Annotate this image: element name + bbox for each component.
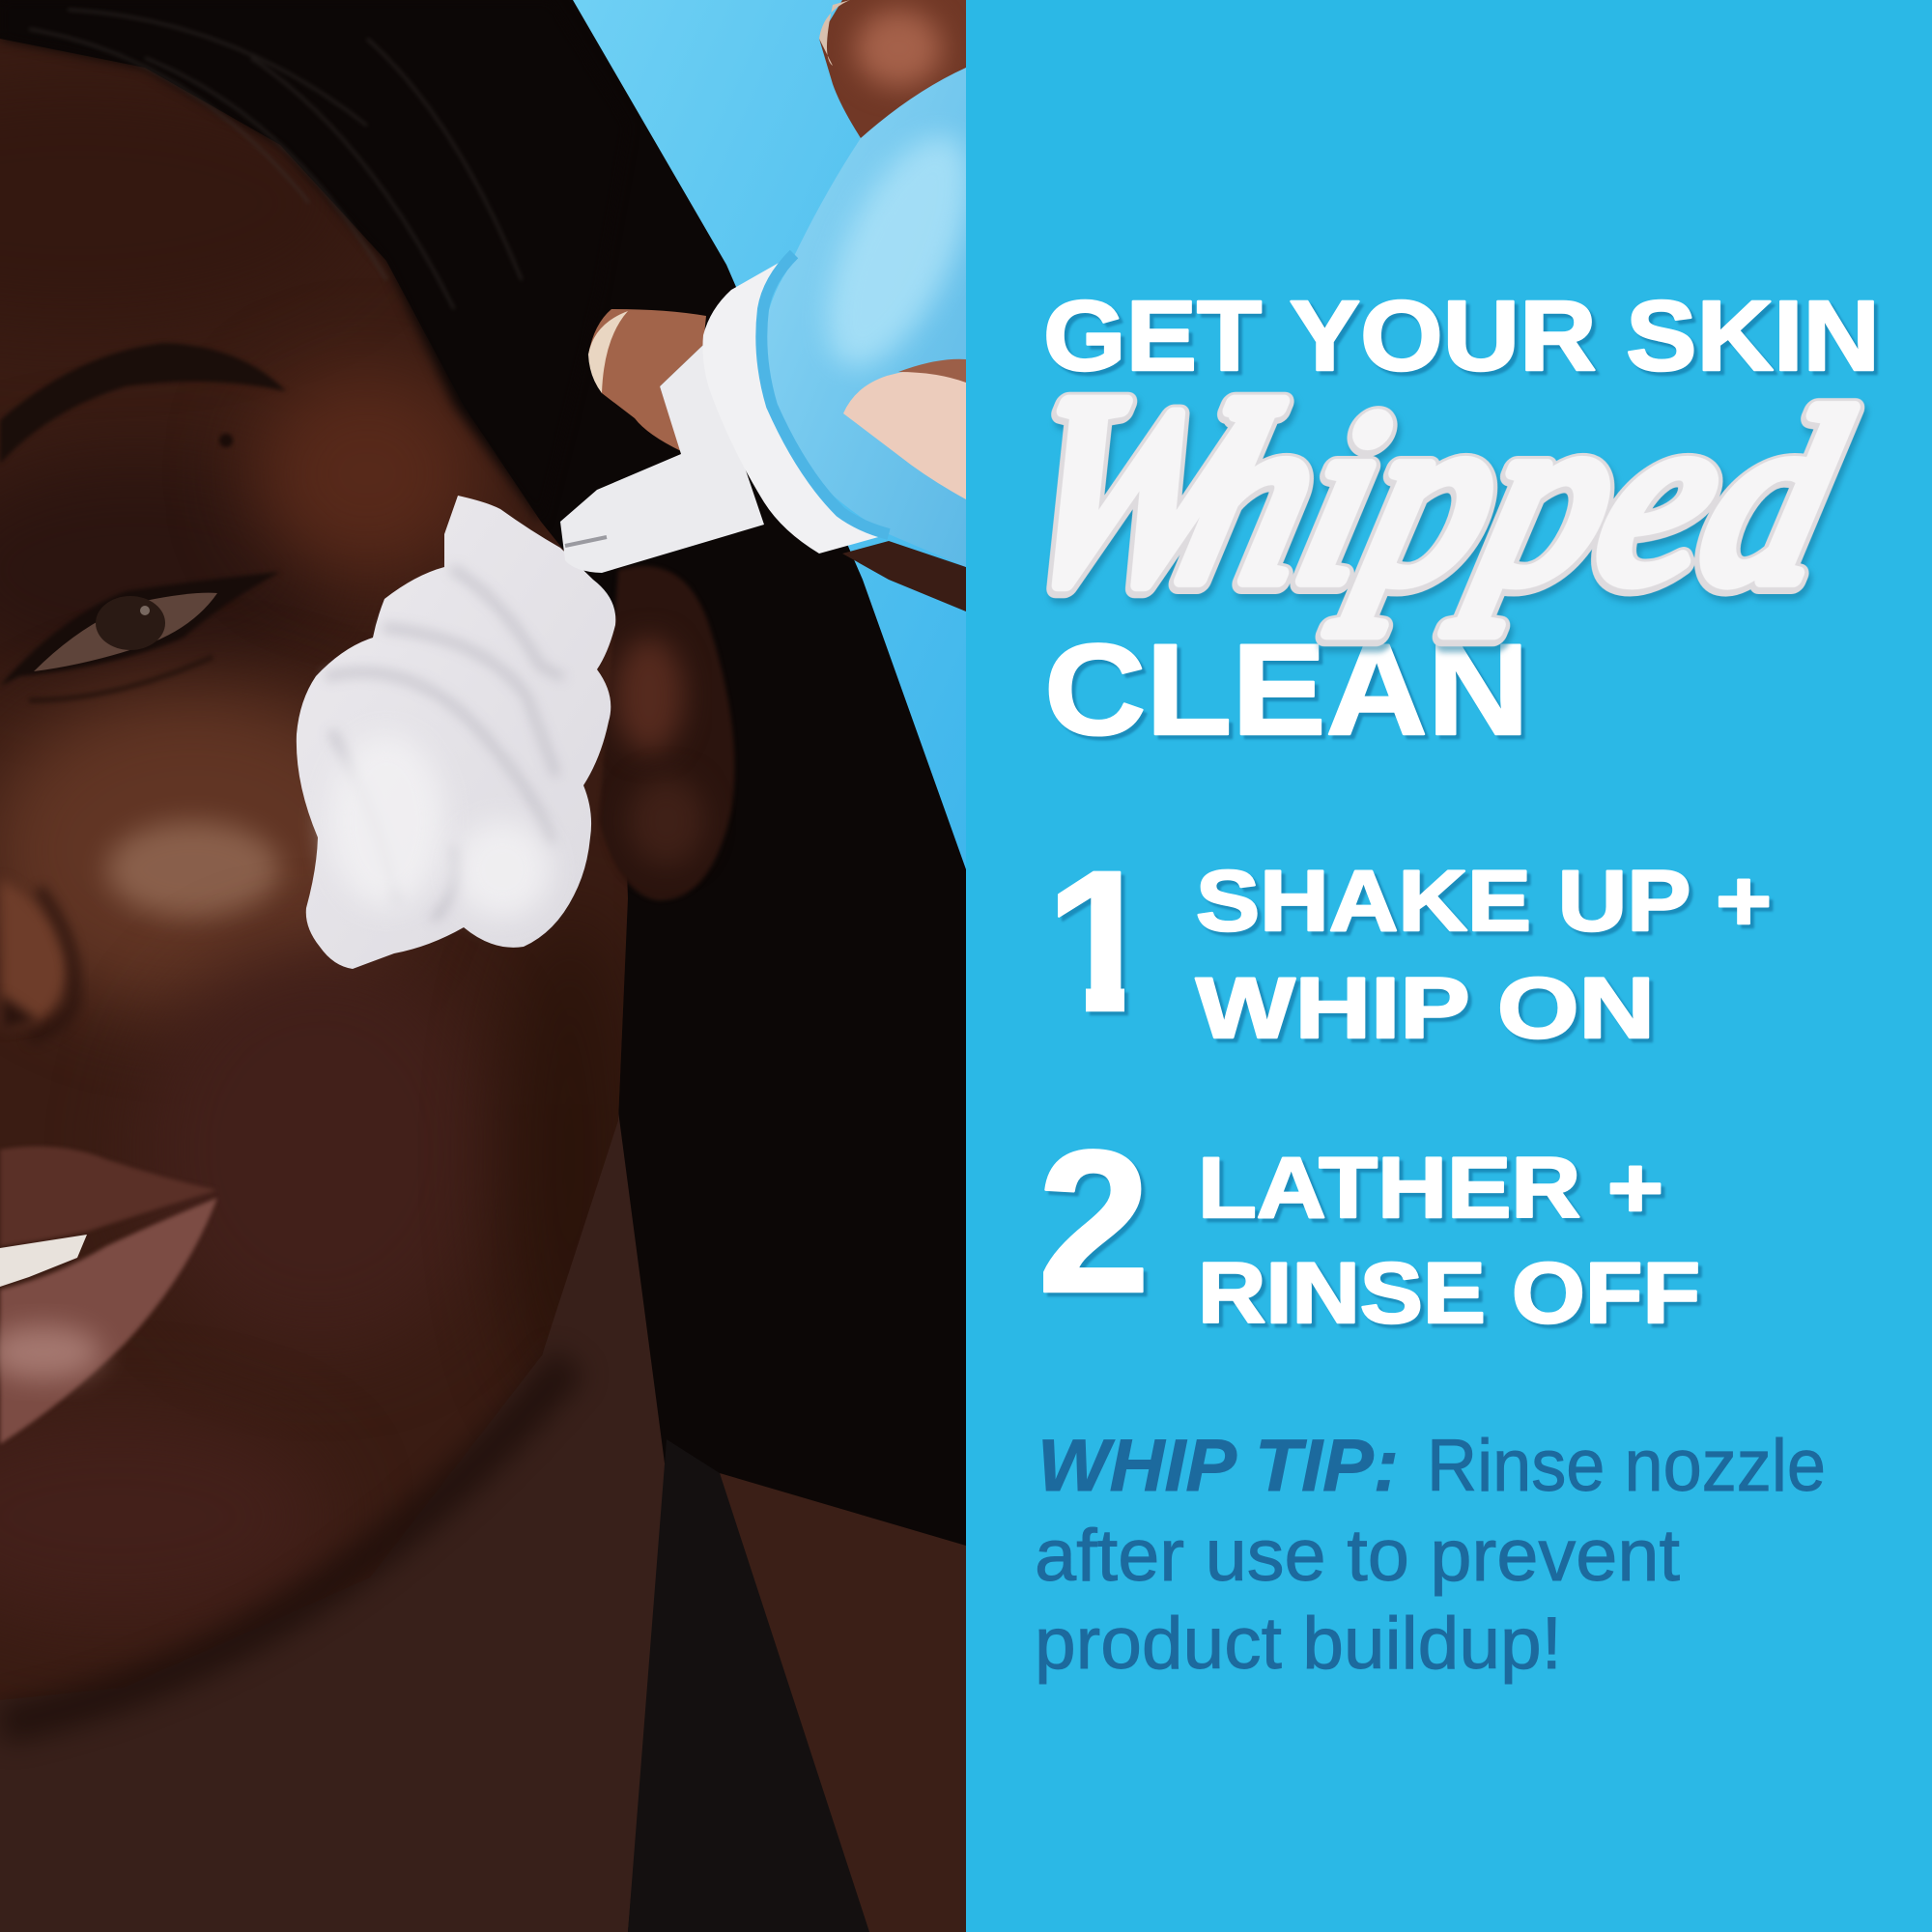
hand and bottle xyxy=(560,0,1000,611)
blue studio background xyxy=(573,0,966,869)
heading: get your skin: GET YOUR SKIN xyxy=(1043,280,1880,391)
lower lip xyxy=(0,1198,217,1444)
nose xyxy=(0,879,66,1029)
step 2 text xyxy=(1198,1139,1700,1341)
shoulder xyxy=(720,1473,966,1932)
ear shape xyxy=(599,566,735,900)
ear xyxy=(599,566,735,900)
under-eye fold xyxy=(29,657,213,700)
mole xyxy=(219,434,233,447)
top strap xyxy=(628,1439,869,1932)
step 1 text: SHAKE UP + xyxy=(1196,852,1772,949)
whip tip text block: after use to prevent xyxy=(1035,1515,1680,1597)
lower finger nail xyxy=(843,363,966,499)
white collar xyxy=(702,254,889,554)
top finger xyxy=(819,0,966,138)
lower finger skin edge xyxy=(898,359,966,383)
sclera xyxy=(34,593,217,671)
step 2 text: LATHER + xyxy=(1198,1139,1663,1236)
nostril shadow xyxy=(0,995,39,1032)
foam light areas xyxy=(328,734,444,908)
iris xyxy=(96,596,165,650)
bottle body xyxy=(764,68,966,567)
temple warm tone xyxy=(251,367,483,580)
step number 2: 2 xyxy=(1037,1108,1151,1335)
heading: whipped script: Whipped xyxy=(990,340,1870,639)
jaw line shadow xyxy=(0,1362,570,1724)
nose side shadow xyxy=(29,889,75,1038)
top finger nail xyxy=(819,0,850,66)
eyelid lash line xyxy=(0,572,280,686)
photo backdrop xyxy=(0,0,966,1932)
whip tip text block: WHIP TIP: xyxy=(1037,1425,1399,1507)
thumb left xyxy=(588,309,706,451)
chin xyxy=(0,1467,253,1566)
lower lip highlight xyxy=(0,1325,101,1379)
lower cheek xyxy=(194,927,404,1105)
whip tip text block: Rinse nozzle xyxy=(1427,1425,1826,1507)
teeth xyxy=(0,1235,87,1287)
thumb nail xyxy=(588,311,628,393)
hairline fringe xyxy=(0,0,628,522)
foam body xyxy=(297,496,615,969)
step 1 text: WHIP ON xyxy=(1196,959,1655,1056)
inner ear glow xyxy=(614,638,684,753)
forehead shading xyxy=(0,77,367,328)
whip tip text block: product buildup! xyxy=(1035,1603,1562,1685)
white nozzle xyxy=(560,345,764,573)
eye socket shading xyxy=(0,462,316,670)
face xyxy=(0,39,628,1642)
hair texture xyxy=(29,10,522,309)
iris catchlight xyxy=(140,606,150,615)
cheek highlight xyxy=(106,821,280,918)
cheek warm tone xyxy=(0,686,406,1014)
jaw shadow xyxy=(494,944,622,1351)
step 1 xyxy=(1045,830,1772,1056)
step 1 text xyxy=(1196,852,1772,1056)
heading: clean: CLEAN xyxy=(1044,618,1529,762)
step 2 xyxy=(1037,1108,1700,1341)
neck and chest xyxy=(0,1111,667,1932)
panel: blue instructions panel xyxy=(966,0,1932,1932)
eyebrow xyxy=(0,343,286,464)
mouth xyxy=(0,1147,217,1444)
top finger highlight xyxy=(855,10,942,87)
face base tone xyxy=(0,39,628,1642)
heading: whipped script: Whipped xyxy=(989,342,1869,641)
shadow of hand below bottle xyxy=(842,541,966,611)
ear lobe shade xyxy=(628,777,705,866)
foam on cheek xyxy=(297,496,615,969)
eye xyxy=(0,572,280,686)
upper lip xyxy=(0,1147,217,1246)
bottle highlight xyxy=(797,115,1000,387)
blue collar ring xyxy=(761,254,889,534)
nozzle slit xyxy=(565,537,607,546)
step 2 text: RINSE OFF xyxy=(1198,1244,1700,1341)
step number 1: 1 xyxy=(1045,830,1157,1054)
whip tip text block xyxy=(1035,1425,1826,1685)
panel: photo of woman applying whipped cleanser xyxy=(0,0,1000,1932)
foam folds xyxy=(328,570,560,918)
